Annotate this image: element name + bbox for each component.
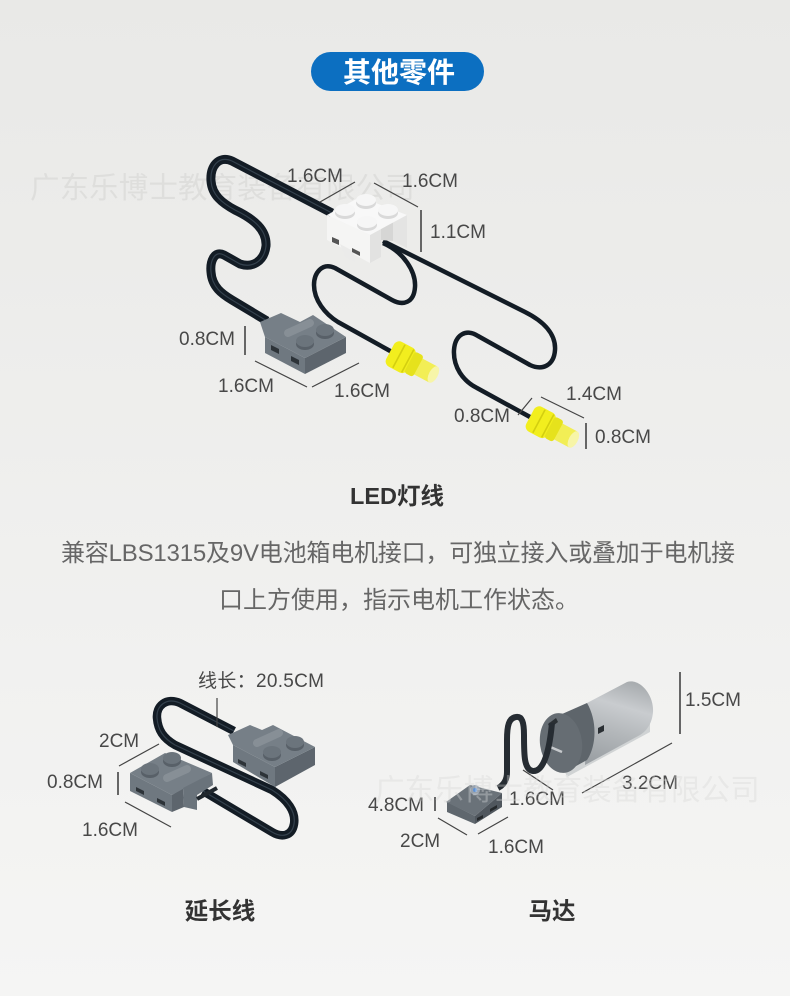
LED wire dimension labels: 0.8CM: [595, 427, 651, 448]
LED wire dimension labels: 1.6CM: [334, 381, 390, 402]
LED wire dimension labels: 1.4CM: [566, 384, 622, 405]
LED wire dimension lines: [245, 182, 586, 449]
motor diagram: [368, 672, 741, 858]
motor cable: [498, 717, 552, 788]
extension dimension lines: [118, 698, 217, 827]
extension dimension labels: 1.6CM: [82, 820, 138, 841]
heading: motor: 马达: [528, 898, 576, 924]
thin cable to first LED: [314, 243, 415, 352]
heading: LED wire: LED灯线: [350, 483, 444, 509]
LED wire diagram: [179, 159, 651, 454]
LED wire dimension labels: 1.6CM: [402, 171, 458, 192]
description: [61, 540, 735, 614]
extension dimension labels: 线长：20.5CM: [198, 670, 324, 692]
watermark overlay on motor brick: 广东乐博士教育装备有限公司: [375, 774, 760, 807]
title pill: 其他零件: [343, 57, 455, 88]
extension dimension labels: 2CM: [99, 731, 139, 752]
extension dimension labels: [47, 670, 324, 841]
motor dimension labels: [368, 690, 741, 858]
white brick: [327, 194, 407, 263]
cable loop: [157, 701, 294, 835]
heading: extension cable: 延长线: [185, 898, 255, 924]
motor dimension labels: 4.8CM: [368, 795, 424, 816]
LED 2: [524, 404, 584, 454]
motor dimension labels: 2CM: [400, 831, 440, 852]
LED wire dimension labels: 1.1CM: [430, 222, 486, 243]
thick cable: [211, 159, 332, 321]
LED 1: [384, 339, 444, 389]
motor dimension lines: [435, 672, 680, 835]
brick far: [228, 725, 315, 787]
long cable to second LED: [383, 241, 555, 417]
grey brick: [260, 313, 346, 374]
motor dimension labels: 1.6CM: [488, 837, 544, 858]
LED wire dimension labels: 0.8CM: [454, 406, 510, 427]
small brick: [446, 785, 502, 824]
description: 兼容LBS1315及9V电池箱电机接口，可独立接入或叠加于电机接: [61, 540, 735, 567]
LED wire dimension labels: 0.8CM: [179, 329, 235, 350]
description: 口上方使用，指示电机工作状态。: [219, 587, 579, 614]
LED wire dimension labels: 1.6CM: [287, 166, 343, 187]
LED wire dimension labels: [179, 166, 651, 448]
motor body: [536, 681, 653, 777]
watermark bottom: 广东乐博士教育装备有限公司: [375, 774, 760, 807]
motor dimension labels: 1.5CM: [685, 690, 741, 711]
extension cable diagram: [47, 670, 324, 841]
LED wire dimension labels: 1.6CM: [218, 376, 274, 397]
motor dimension labels: 1.6CM: [509, 789, 565, 810]
title pill: [311, 52, 484, 91]
motor dimension labels: 3.2CM: [622, 773, 678, 794]
brick near: [130, 752, 217, 812]
watermark top: 广东乐博士教育装备有限公司: [30, 172, 415, 205]
extension dimension labels: 0.8CM: [47, 772, 103, 793]
